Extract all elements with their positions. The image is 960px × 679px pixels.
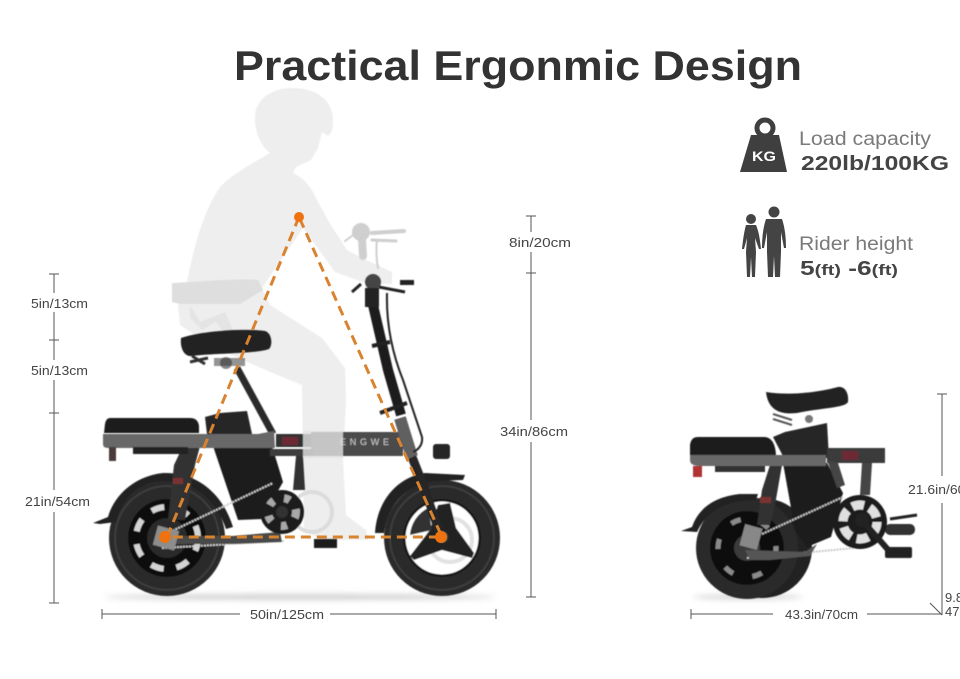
label: seat adjustment lower: 5in/13cm [31, 363, 88, 378]
pedal [314, 539, 337, 548]
label: seat height: 21in/54cm [25, 494, 90, 509]
load capacity [740, 120, 949, 175]
folded seat [766, 387, 848, 425]
apex dot [294, 212, 304, 222]
handlebar stem and fork [372, 293, 441, 537]
folded rack bar [690, 455, 826, 466]
battery [213, 446, 283, 520]
rear fender [93, 473, 233, 529]
left height dimensions [25, 274, 90, 603]
chainring [260, 456, 332, 534]
main bike, side view [93, 274, 500, 596]
folded chain [747, 497, 855, 558]
right height dimensions [500, 216, 571, 597]
label: rider height: Rider height [799, 234, 914, 255]
folded height dimension [908, 394, 960, 619]
front fender [375, 473, 465, 533]
rear wheel [109, 480, 225, 596]
label: length: 50in/125cm [250, 607, 324, 622]
folded crank and pedal [862, 520, 890, 552]
rear rack cushion [104, 418, 199, 433]
folded swing arm [745, 544, 817, 560]
folded front wheel behind [712, 498, 812, 598]
front axle dot [435, 531, 447, 543]
frame ghost overlay [303, 431, 343, 458]
rear shock absorber [168, 446, 200, 520]
headlight [433, 444, 450, 459]
ghost raised handlebar [345, 223, 404, 268]
rider height [742, 206, 914, 280]
folded rear wheel [696, 497, 798, 599]
folded bike [681, 387, 917, 599]
main frame beam with logo: ENGWE [340, 437, 390, 447]
value: rider height: 5(ft) -6 (ft) [800, 258, 898, 280]
rear axle dot [159, 531, 171, 543]
label: handlebar height: 34in/86cm [500, 424, 568, 439]
label: handlebar adjustment: 8in/20cm [509, 235, 571, 250]
seat post and down tube [237, 368, 273, 434]
folded shock [757, 465, 782, 525]
folded chainring [833, 495, 887, 549]
folded rack cushion [690, 437, 776, 455]
title: Practical Ergonmic Design [234, 42, 802, 89]
handlebar grip folded [885, 524, 915, 535]
icon: kg weight: KG [752, 148, 776, 164]
icon: woman and man silhouettes [742, 206, 786, 277]
rear rack bar [103, 431, 275, 448]
folded length dimension [691, 603, 942, 622]
length dimension [102, 607, 496, 622]
label: seat adjustment upper: 5in/13cm [31, 296, 88, 311]
front wheel [384, 480, 500, 596]
label: folded length: 43.3in/70cm [785, 607, 858, 622]
main frame beam with logo [270, 432, 403, 456]
folded battery [783, 463, 843, 547]
ground shadows [105, 594, 803, 600]
ergonomic triangle [159, 212, 447, 543]
rider silhouette [178, 88, 392, 540]
icon: kg weight [740, 120, 787, 172]
ghost raised seat [172, 279, 263, 333]
value: load capacity: 220lb/100KG [801, 153, 949, 175]
seat [181, 330, 271, 369]
folded frame joint [827, 448, 885, 495]
chain [162, 483, 284, 548]
folded rear fender [681, 494, 758, 532]
handlebar head [352, 274, 414, 307]
front disc hub [436, 531, 448, 543]
rear shock link [276, 434, 311, 447]
label: load capacity: Load capacity [799, 129, 932, 150]
swing arm [162, 532, 282, 544]
